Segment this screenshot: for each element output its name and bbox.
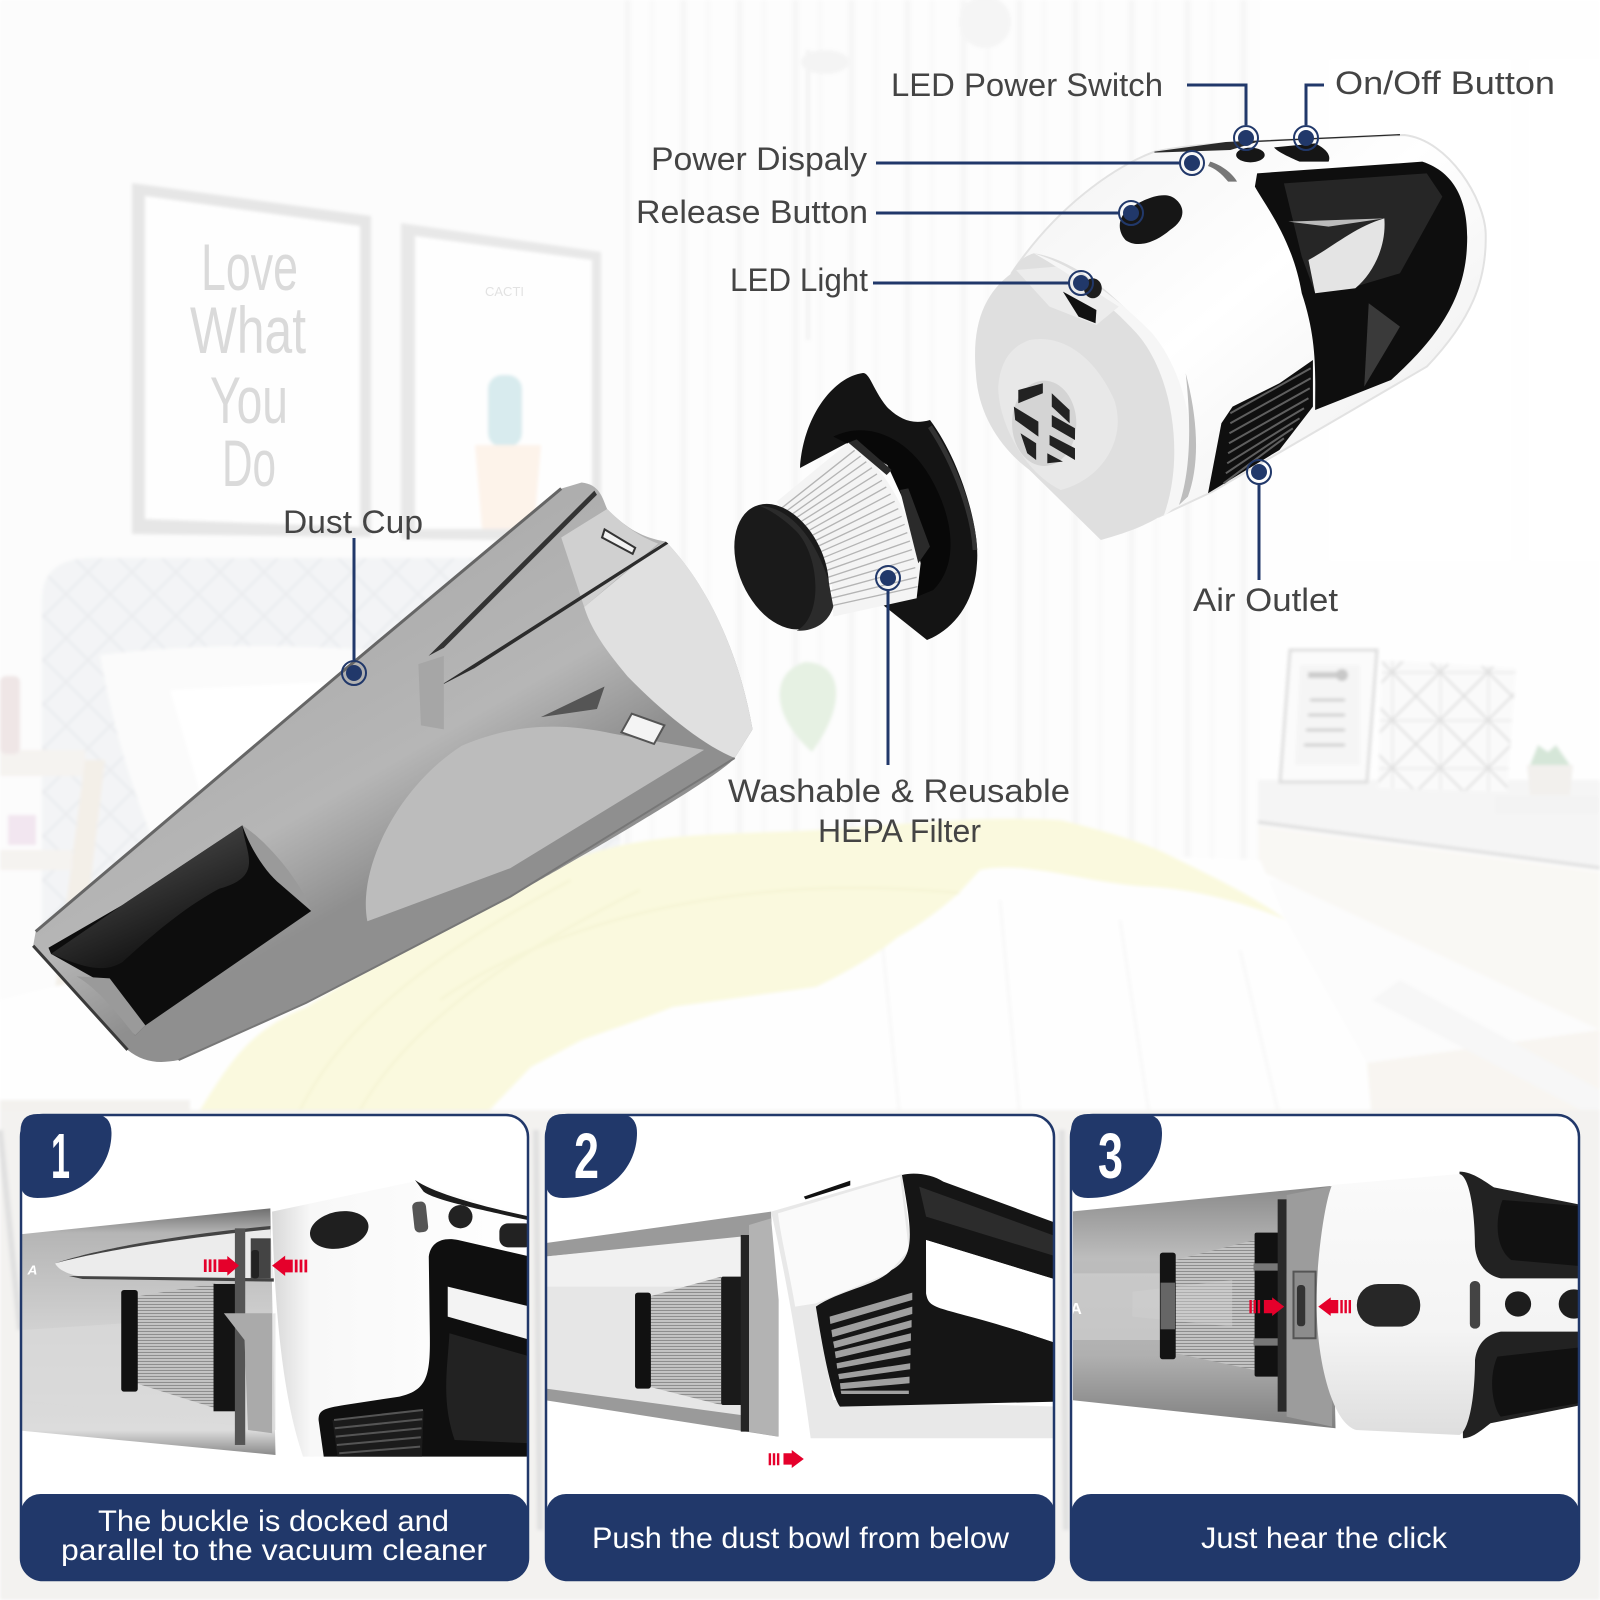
panel 3: hear the click <box>1070 1114 1589 1580</box>
on off button <box>1274 143 1329 162</box>
wall art text: Love What You Do: CACTI <box>485 284 524 299</box>
label: Washable & Reusable HEPA Filter: Washable & Reusable <box>728 773 1070 809</box>
panel 2 product image <box>544 1174 1057 1468</box>
HEPA filter illustration <box>716 373 977 644</box>
step 3 badge: 3 <box>1098 1120 1123 1192</box>
vacuum motor head illustration <box>975 134 1486 540</box>
step 1 caption bar <box>20 1494 528 1580</box>
step 1 caption bar: The buckle is docked and <box>98 1505 449 1538</box>
label: Dust Cup: Dust Cup <box>283 504 423 540</box>
step 2 caption bar: Push the dust bowl from below <box>592 1522 1009 1555</box>
step 3 badge <box>1071 1114 1162 1198</box>
panel 1 red arrows <box>204 1256 307 1276</box>
head body <box>1012 135 1486 517</box>
step 3 caption bar: Just hear the click <box>1201 1522 1448 1555</box>
vent grille <box>1208 360 1313 493</box>
release button <box>1120 195 1182 244</box>
step 1 badge: 1 <box>51 1120 70 1192</box>
panel 1 product image <box>14 1180 534 1457</box>
rear grey end cap <box>975 253 1189 540</box>
label: LED Power Switch: LED Power Switch <box>891 67 1163 103</box>
wall art text: Love What You Do <box>190 230 524 500</box>
filter flange <box>800 373 977 640</box>
power display strip <box>1208 162 1237 182</box>
callout lines <box>354 85 1324 765</box>
label: Power Dispaly: Power Dispaly <box>651 141 867 177</box>
wall art text: Love What You Do: Do <box>222 426 276 500</box>
panel border <box>546 1115 1054 1580</box>
marker rings <box>342 126 1318 685</box>
step 2 badge <box>546 1114 637 1198</box>
marker dots <box>346 130 1314 681</box>
dust cup illustration <box>33 482 753 1062</box>
wall art text: Love What You Do: Love <box>201 230 298 304</box>
step 2 badge: 2 <box>574 1120 599 1192</box>
step 1 caption bar: parallel to the vacuum cleaner <box>61 1534 487 1567</box>
panel 2: push the dust bowl <box>544 1114 1057 1580</box>
step 2 caption bar <box>546 1494 1055 1580</box>
label: Washable & Reusable HEPA Filter <box>728 773 1070 849</box>
wall art text: Love What You Do: What <box>190 293 306 367</box>
step 3 caption bar <box>1071 1494 1580 1580</box>
wall art text: Love What You Do: You <box>210 363 288 437</box>
label: Air Outlet: Air Outlet <box>1193 582 1338 618</box>
step 1 badge <box>20 1114 112 1198</box>
panel 3 product image <box>1070 1172 1589 1438</box>
label: LED Light: LED Light <box>730 262 868 298</box>
panel border <box>21 1115 528 1580</box>
LED switch <box>1236 148 1265 162</box>
label: Washable & Reusable HEPA Filter: HEPA Filter <box>818 813 981 849</box>
label: On/Off Button: On/Off Button <box>1335 65 1555 101</box>
callouts <box>342 85 1324 765</box>
handle opening <box>1255 162 1467 410</box>
top edge line <box>1154 134 1400 153</box>
label: Release Button: Release Button <box>636 194 868 230</box>
panel border <box>1071 1115 1579 1580</box>
panel 3 red arrows <box>1249 1297 1351 1316</box>
panel 1: buckle docked <box>14 1114 534 1580</box>
panel 3 product image: A <box>1070 1301 1082 1318</box>
panel 2 red arrow <box>769 1450 804 1468</box>
panel 1 product image: A <box>27 1263 38 1277</box>
blanket <box>194 819 1286 1120</box>
LED pocket <box>1016 267 1119 325</box>
air grill <box>1012 381 1076 466</box>
